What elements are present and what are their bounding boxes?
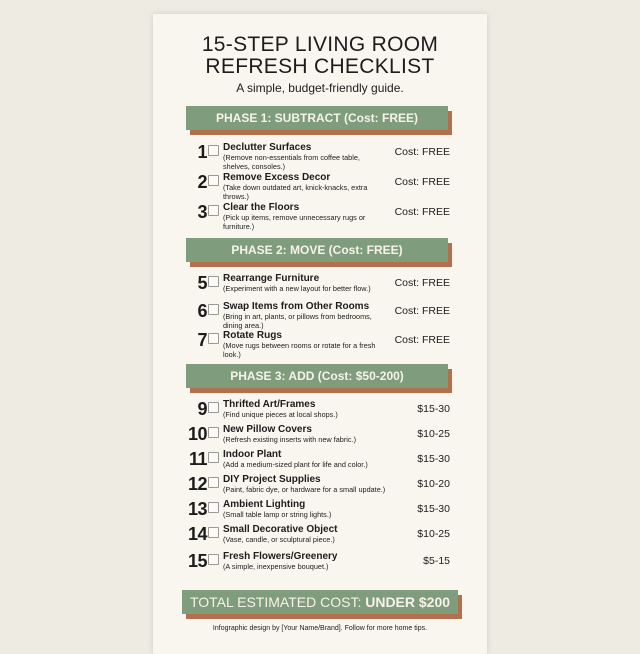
step 10: (Refresh existing inserts with new fabric.) — [223, 435, 356, 444]
step 6: (Bring in art, plants, or pillows from bedrooms, dining area.) — [223, 312, 372, 330]
step 15: $5-15 — [423, 555, 450, 567]
step 2 — [197, 172, 450, 200]
step 7: 7 — [197, 330, 207, 350]
step 3: Cost: FREE — [395, 206, 450, 218]
step 5: (Experiment with a new layout for better flow.) — [223, 284, 371, 293]
step 12: 12 — [188, 474, 207, 494]
step 6 — [197, 301, 450, 330]
phase 3 header — [186, 364, 448, 388]
step 1: 1 — [197, 142, 207, 162]
step 13: $15-30 — [417, 503, 450, 515]
step 11: $15-30 — [417, 453, 450, 465]
step 1: Declutter Surfaces — [223, 142, 311, 153]
step 7 — [197, 330, 450, 358]
step 12: DIY Project Supplies — [223, 474, 321, 485]
subtitle: A simple, budget-friendly guide. — [236, 81, 404, 95]
step 9 — [197, 399, 450, 419]
step 15: Fresh Flowers/Greenery — [223, 551, 338, 562]
step 7: Rotate Rugs — [223, 330, 282, 341]
step 2: 2 — [197, 172, 207, 192]
step 14: Small Decorative Object — [223, 524, 338, 535]
step 2: Cost: FREE — [395, 176, 450, 188]
step 5: Cost: FREE — [395, 277, 450, 289]
step 9: $15-30 — [417, 403, 450, 415]
step 1: (Remove non-essentials from coffee table, shelves, consoles.) — [223, 153, 360, 170]
title: REFRESH CHECKLIST — [205, 55, 435, 78]
step 10 — [188, 424, 450, 444]
phase 3 header: PHASE 3: ADD (Cost: $50-200) — [230, 369, 404, 383]
step 3: (Pick up items, remove unnecessary rugs or furniture.) — [223, 213, 365, 230]
step 9: (Find unique pieces at local shops.) — [223, 410, 338, 419]
step 11 — [189, 449, 450, 469]
total cost banner — [182, 590, 458, 614]
title — [202, 33, 438, 78]
step 13: (Small table lamp or string lights.) — [223, 510, 331, 519]
title: 15-STEP LIVING ROOM — [202, 33, 438, 56]
step 3 — [197, 202, 450, 230]
step 5 — [197, 273, 450, 293]
phase 2 header: PHASE 2: MOVE (Cost: FREE) — [231, 243, 403, 257]
step 10: 10 — [188, 424, 207, 444]
step 12: (Paint, fabric dye, or hardware for a small update.) — [223, 485, 385, 494]
step 13: 13 — [188, 499, 207, 519]
phase 1 header: PHASE 1: SUBTRACT (Cost: FREE) — [216, 111, 418, 125]
step 13 — [188, 499, 450, 519]
step 14: $10-25 — [417, 528, 450, 540]
step 15: (A simple, inexpensive bouquet.) — [223, 562, 328, 571]
step 3: 3 — [197, 202, 207, 222]
phase 2 header — [186, 238, 448, 262]
phase 1 header — [186, 106, 448, 130]
step 6: 6 — [197, 301, 207, 321]
step 9: Thrifted Art/Frames — [223, 399, 315, 410]
step 10: $10-25 — [417, 428, 450, 440]
step 7: (Move rugs between rooms or rotate for a fresh look.) — [223, 341, 376, 358]
step 1: Cost: FREE — [395, 146, 450, 158]
step 14: 14 — [188, 524, 207, 544]
step 7: Cost: FREE — [395, 334, 450, 346]
step 2: (Take down outdated art, knick-knacks, extra throws.) — [223, 183, 367, 200]
footer credit: Infographic design by [Your Name/Brand]. Follow for more home tips. — [213, 625, 427, 632]
step 15 — [188, 551, 450, 571]
step 5: 5 — [197, 273, 207, 293]
step 11: Indoor Plant — [223, 449, 281, 460]
step 3: Clear the Floors — [223, 202, 299, 213]
step 14: (Vase, candle, or sculptural piece.) — [223, 535, 335, 544]
step 11: (Add a medium-sized plant for life and color.) — [223, 460, 368, 469]
step 9: 9 — [197, 399, 207, 419]
step 13: Ambient Lighting — [223, 499, 305, 510]
step 6: Cost: FREE — [395, 305, 450, 317]
card — [153, 14, 487, 654]
step 12: $10-20 — [417, 478, 450, 490]
total cost banner: TOTAL ESTIMATED COST: UNDER $200 — [190, 594, 450, 610]
step 1 — [197, 142, 450, 170]
step 11: 11 — [189, 449, 207, 469]
step 10: New Pillow Covers — [223, 424, 312, 435]
step 15: 15 — [188, 551, 207, 571]
step 2: Remove Excess Decor — [223, 172, 330, 183]
step 14 — [188, 524, 450, 544]
step 12 — [188, 474, 450, 494]
step 6: Swap Items from Other Rooms — [223, 301, 369, 312]
step 5: Rearrange Furniture — [223, 273, 319, 284]
